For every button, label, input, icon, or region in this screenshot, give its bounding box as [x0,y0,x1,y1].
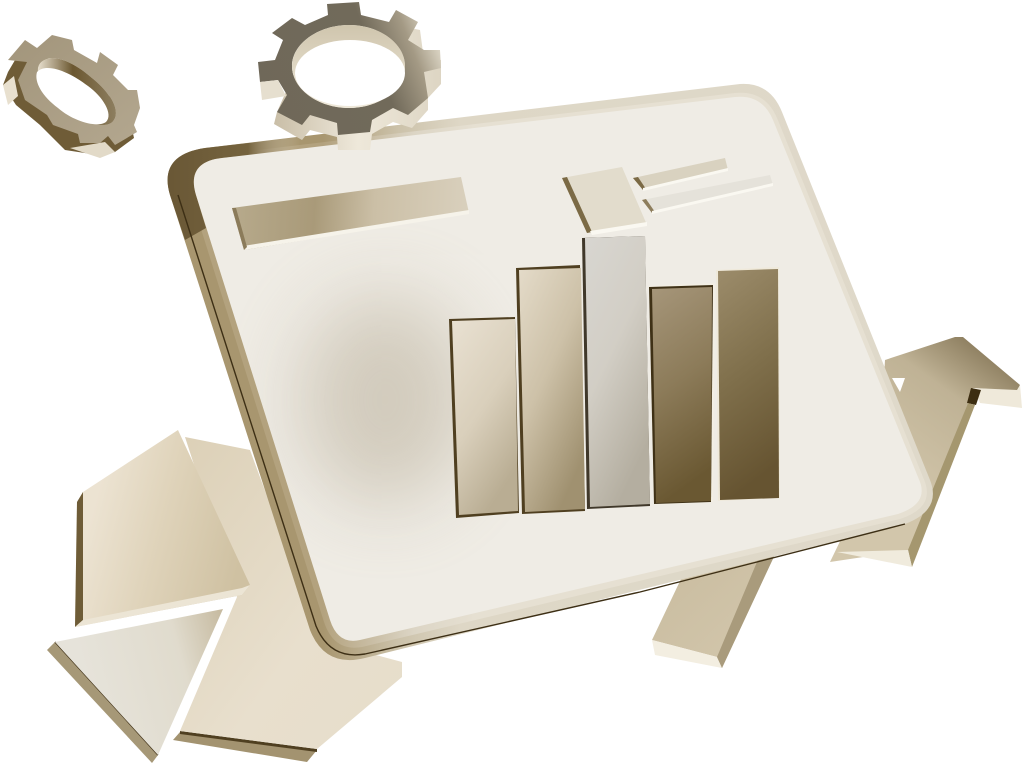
icon: arrow behind tablet [652,337,1022,668]
gear extrusion [3,55,134,155]
bar 5 [716,267,780,501]
bar 3 [582,236,650,509]
bar 2 [516,265,585,514]
legend line two [642,175,773,214]
hexagon face [180,437,402,749]
upper facet [75,430,250,627]
triangle facet [47,609,223,763]
legend [562,158,773,235]
hexagon bottom edge [173,732,317,762]
tablet face [194,97,922,641]
arrow tail [652,548,778,668]
rim dark line [178,195,905,655]
gear inner wall [292,25,405,108]
legend line one [633,158,728,191]
white gap [60,597,235,765]
heading bar [232,177,469,250]
gear hole [36,68,109,124]
legend swatch [562,167,647,235]
gear hole [295,40,405,106]
tablet rim [168,84,933,660]
gear inner wall [38,58,116,125]
gear face [258,2,441,135]
icon: small gear [3,35,140,158]
panel: tablet [168,84,933,660]
gear extrusion [274,24,441,150]
rim dark corner [168,137,300,240]
soft shadow on face [300,295,470,505]
arrow head [830,337,1022,567]
bar 1 [449,317,519,518]
bar 4 [649,283,715,505]
panel: hexagon backdrop lower left [47,430,402,765]
icon: large gear [258,2,441,150]
gear face [8,35,140,145]
bar chart [449,236,780,518]
gear left tooth extrusion [260,80,286,100]
tablet lip [188,93,927,648]
